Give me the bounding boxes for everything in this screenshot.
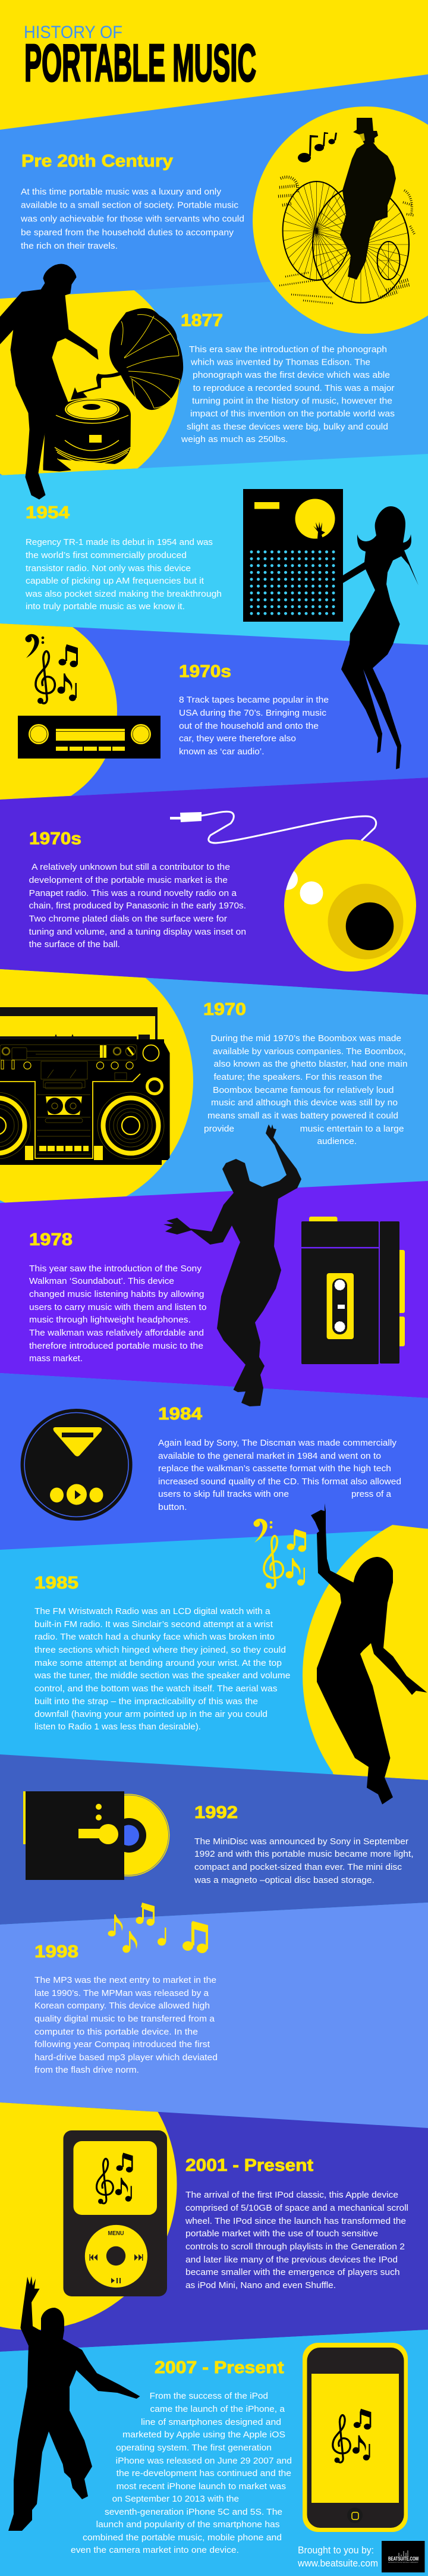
logo: beatsuite <box>382 2541 424 2572</box>
text block: pre 20th century: was only achievable for those with servants who could <box>20 214 244 224</box>
text block: 1954 <box>25 538 222 612</box>
heading: 1998: 1998 <box>34 1942 78 1961</box>
text block: 1998: from the flash drive norm. <box>34 2066 139 2075</box>
icon: music notes <box>333 2409 371 2463</box>
small speaker ring <box>147 1079 162 1093</box>
text block: 2001: as iPod Mini, Nano and even Shuffle. <box>185 2281 336 2290</box>
horn ribs <box>121 315 180 408</box>
panel: 1978 walkman <box>0 1181 428 1398</box>
text block: pre 20th century: be spared from the household duties to accompany <box>21 228 234 238</box>
text block: 1985: three sections which hinged where they joined, so they could <box>34 1646 286 1655</box>
text block: 1984: available to the general market in 1984 and went on to <box>158 1452 381 1461</box>
text block: 1984: users to skip full tracks with one <box>158 1490 289 1499</box>
panel: 1998 mp3 <box>0 1903 428 2128</box>
panel: 1970s 8 track <box>0 623 428 800</box>
text block: 1970 boombox: provide <box>204 1124 234 1134</box>
bushes and ground speckle <box>278 177 415 303</box>
panel: 2001 ipod <box>0 2102 428 2352</box>
heading: 1984: 1984 <box>158 1405 202 1424</box>
text block: 1970s panapet: Panapet radio. This was a round novelty radio on a <box>29 889 237 898</box>
text block: 1992: The MiniDisc was announced by Sony in September <box>194 1837 408 1847</box>
text block: 2007: operating system. The first generation <box>116 2443 272 2453</box>
panel: 1992 minidisc <box>0 1754 428 1925</box>
credit text: Brought to you by: <box>298 2544 374 2556</box>
text block: 1877: slight as these devices were big, bulky and could <box>187 422 388 432</box>
text block: 1877: turning point in the history of music, however the <box>192 396 392 406</box>
silhouette: dancing woman <box>311 1503 427 1804</box>
text block: 1998: following year Compaq introduced the first <box>34 2040 210 2049</box>
icon: car radio <box>18 716 160 759</box>
yellow circle overlap: 1985 <box>333 1767 428 1780</box>
icon: ipod <box>63 2130 167 2296</box>
text block: 1978: changed music listening habits by allowing <box>29 1290 204 1299</box>
text block: 1970s panapet <box>29 863 246 949</box>
text block: 2007: launch and popularity of the smartphone has <box>96 2520 280 2530</box>
text block: 1978: This year saw the introduction of the Sony <box>29 1264 202 1274</box>
heading: 2007 - present: 2007 - Present <box>155 2358 284 2377</box>
text block: 1978: Walkman ‘Soundabout’. This device <box>29 1277 174 1286</box>
text block: 1978: therefore introduced portable music to the <box>29 1342 203 1351</box>
heading: 1978: 1978 <box>29 1230 73 1249</box>
text block: 1877: phonograph was the first device which was able <box>193 371 390 380</box>
text block: 2007: came the launch of the iPhone, a <box>150 2405 285 2414</box>
text block: 2001: wheel. The IPod since the launch has transformed the <box>185 2217 406 2226</box>
text block: 1970s 8 track: USA during the 70’s. Bringing music <box>179 709 326 718</box>
text block: 1978 <box>29 1264 207 1364</box>
text block: 1970 boombox: available by various companies. The Boombox, <box>213 1047 406 1057</box>
heading: 1954: 1954 <box>26 503 70 522</box>
text block: 1954: into truly portable music as we know it. <box>26 602 185 612</box>
text block: 1970s panapet: chain, first produced by Panasonic in the early 1970s. <box>29 901 246 911</box>
boombox buttons <box>25 1146 103 1160</box>
icon: music notes <box>108 1903 208 1953</box>
text block: 1954: was also pocket sized making the breakthrough <box>25 590 222 599</box>
text block: 1970s 8 track: car, they were therefore also <box>179 734 296 744</box>
text block: pre 20th century: available to a small section of society. Portable music <box>21 201 238 211</box>
text block: 2001: portable market with the use of touch sensitive <box>185 2229 378 2239</box>
heading: 1970s: 1970s <box>179 662 231 681</box>
icon: music notes <box>25 634 78 704</box>
text block: 1970s panapet: tuning and volume, and a tuning display was inset on <box>29 927 246 937</box>
text block: 1970s panapet: A relatively unknown but still a contributor to the <box>32 863 230 872</box>
yellow circle: bicycle <box>253 106 428 334</box>
icon: music notes <box>298 132 337 162</box>
text block: 1984: button. <box>158 1503 187 1512</box>
text block: 1970 boombox: music and although this device was still by no <box>211 1098 398 1108</box>
ipod click wheel: MENU <box>108 2230 124 2237</box>
text block: 2001: became smaller with the emergence of players such <box>185 2268 400 2277</box>
yellow circle: 1970s <box>0 623 117 800</box>
yellow circle: 1970 <box>0 969 193 1203</box>
text block: 2001: The arrival of the first IPod classic, this Apple device <box>185 2190 398 2200</box>
text block: 2001 <box>185 2190 408 2290</box>
walkman cassette <box>327 1273 354 1339</box>
text block: 1954: capable of picking up AM frequencies but it <box>26 576 204 586</box>
text block: 2007: the re-development has continued and the <box>117 2469 291 2478</box>
icon: phonograph <box>55 308 183 464</box>
yellow circle: 1877 <box>0 290 179 475</box>
silhouette: waving man <box>8 2276 140 2531</box>
rider face detail <box>357 133 365 143</box>
text block: 1970s 8 track: known as ‘car audio’. <box>179 747 264 757</box>
text block: 2007 <box>71 2392 292 2555</box>
text block: 1998: The MP3 was the next entry to market in the <box>34 1976 216 1985</box>
text block: 1970s panapet: development of the portable music market is the <box>29 876 228 885</box>
text block: 1970 boombox: means small as it was battery powered it could <box>207 1111 398 1121</box>
text block: 1970 boombox: music entertain to a large <box>300 1124 404 1134</box>
text block: 1970s 8 track: out of the household and onto the <box>179 722 319 731</box>
phonograph horn <box>109 308 183 410</box>
text block: 1985: control, and the bottom was the watch itself. The aerial was <box>34 1684 277 1694</box>
icon: transistor radio <box>243 489 343 622</box>
text block: 1954: transistor radio. Not only was this device <box>26 564 191 574</box>
text block: 1978: mass market. <box>29 1354 83 1364</box>
text block: 2007: line of smartphones designed and <box>141 2418 281 2427</box>
panel: 1984 discman <box>0 1373 428 1559</box>
text block: 1954: the world’s first commercially produced <box>26 551 187 560</box>
heading: 1985: 1985 <box>34 1574 78 1593</box>
text block: 1970s 8 track: 8 Track tapes became popular in the <box>179 695 329 705</box>
panel: 1970 boombox <box>0 969 428 1203</box>
text block: 1985: make some attempt at bending around your wrist. At the top <box>34 1659 282 1668</box>
text block: 1970 boombox: also known as the ghetto blaster, had one main <box>214 1060 408 1069</box>
text block: 1877: weigh as much as 250lbs. <box>181 435 288 444</box>
icon: boombox <box>0 1007 170 1165</box>
text block: 1998: quality digital music to be transferred from a <box>34 2014 215 2024</box>
boombox cassette deck <box>37 1080 90 1154</box>
silhouette: man at phonograph <box>0 264 98 499</box>
text block: 1970s 8 track <box>179 695 329 757</box>
text block: 1998: hard-drive based mp3 player which deviated <box>34 2053 218 2063</box>
text block: 2001: and later like many of the previous devices the IPod <box>185 2255 398 2265</box>
text block: 2007: even the camera market into one device. <box>71 2546 239 2555</box>
text block: 1970s panapet: Two chrome plated dials on the surface were for <box>29 914 227 924</box>
text block: 1998 <box>34 1976 218 2075</box>
heading: 1877: 1877 <box>181 311 223 330</box>
left speaker <box>0 1092 30 1159</box>
icon: discman <box>21 1409 133 1521</box>
radio speaker dots <box>251 552 333 613</box>
icon: panapet ball radio <box>170 811 416 972</box>
text block: 1984: increased sound quality of the CD. This format also allowed <box>158 1477 401 1487</box>
panel: 1954 <box>0 454 428 648</box>
text block: 1985: built into the strap – the impracticability of this was the <box>34 1697 258 1706</box>
text block: pre 20th century: the rich on their travels. <box>21 242 118 251</box>
text block: 2001: comprised of 5/10GB of space and a mechanical scroll <box>185 2204 408 2213</box>
text block: 1992: 1992 and with this portable music became more light, <box>194 1850 414 1859</box>
heading: 1970: 1970 <box>203 1000 246 1019</box>
text block: 1992: was a magneto –optical disc based storage. <box>194 1876 374 1885</box>
text block: 2007: From the success of the iPod <box>150 2392 268 2401</box>
text block: 1985: radio. The watch had a chunky face which was broken into <box>34 1632 275 1642</box>
text block: 1992 <box>194 1837 414 1885</box>
tone arm <box>71 370 125 400</box>
panel: 1985 wristwatch radio <box>0 1518 428 1780</box>
yellow circle: 2001 <box>0 2102 177 2330</box>
text block: 2007: most recent iPhone launch to market was <box>117 2482 286 2492</box>
text block: 2007: iPhone was released on June 29 2007 and <box>116 2456 292 2466</box>
text block: 1978: The walkman was relatively affordable and <box>29 1328 204 1338</box>
text block: 2007: seventh-generation iPhone 5C and 5S. The <box>105 2508 282 2517</box>
text block: 1992: compact and pocket-sized than ever. The mini disc <box>194 1863 402 1872</box>
text block: 1970 boombox: During the mid 1970’s the Boombox was made <box>210 1034 401 1043</box>
yellow circle: 1985 <box>303 1525 428 1780</box>
credit text <box>297 2544 378 2569</box>
panel: title banner <box>0 0 428 143</box>
panel: 1877 <box>0 282 428 475</box>
text block: 1970 boombox <box>204 1034 408 1146</box>
text block: 1998: computer to this portable device. In the <box>34 2027 198 2037</box>
text block: 1877: impact of this invention on the portable world was <box>190 409 395 419</box>
text block: 1877: This era saw the introduction of the phonograph <box>189 345 387 355</box>
right speaker <box>97 1092 164 1159</box>
text block: 1998: late 1990’s. The MPMan was released by a <box>34 1989 209 1998</box>
bicycle wheels <box>283 181 409 303</box>
turntable base <box>55 399 131 464</box>
boombox casing outline <box>0 1074 140 1158</box>
text block: 1877: which was invented by Thomas Edison. The <box>190 358 370 368</box>
panel: 1970s panapet <box>0 778 428 995</box>
text block: 1978: users to carry music with them and listen to <box>29 1303 207 1312</box>
text block: 2007: marketed by Apple using the Apple iOS <box>122 2430 285 2440</box>
text block: pre 20th century: At this time portable music was a luxury and only <box>21 187 222 197</box>
illustration: man on penny-farthing bicycle <box>253 106 428 334</box>
panel: 2007 iphone <box>0 2330 428 2576</box>
text block: 1970 boombox: feature; the speakers. For this reason the <box>214 1073 382 1082</box>
text block: 1954: Regency TR-1 made its debut in 1954 and was <box>26 538 213 547</box>
heading: 1970s: 1970s <box>29 829 81 848</box>
icon: music notes <box>253 1519 306 1588</box>
boombox control panel <box>0 1045 159 1080</box>
text block: 1877 <box>181 345 395 444</box>
text block: 1985: downfall (having your arm pointed up in the air you could <box>34 1710 268 1719</box>
heading: 2001 - present: 2001 - Present <box>185 2156 313 2175</box>
logo: beatsuite: PRODUCTION MUSIC LIBRARY <box>388 2561 418 2564</box>
text block: 1984 <box>158 1439 401 1512</box>
text block: 1984: replace the walkman’s cassette format with the high tech <box>158 1464 391 1474</box>
text block: 1970 boombox: audience. <box>317 1137 357 1146</box>
heading: 1992: 1992 <box>194 1803 238 1822</box>
icon: minidisc <box>23 1791 169 1880</box>
text block: pre 20th century <box>20 187 244 251</box>
text block: 1998: Korean company. This device allowed high <box>34 2001 210 2011</box>
icon: walkman <box>301 1217 405 1364</box>
text block: 1984: Again lead by Sony, The Discman was made commercially <box>158 1439 397 1448</box>
icon: iphone <box>303 2343 408 2532</box>
title: history of: HISTORY OF <box>24 23 122 42</box>
text block: 2001: controls to scroll through playlists in the Generation 2 <box>185 2242 405 2252</box>
silhouette: dancing man <box>163 1124 301 1406</box>
text block: 1984: press of a <box>351 1490 392 1499</box>
panel: pre 20th century <box>0 74 428 306</box>
text block: 1970 boombox: Boombox became famous for relatively loud <box>213 1086 394 1095</box>
text block: 1985: The FM Wristwatch Radio was an LCD digital watch with a <box>34 1607 270 1616</box>
heading: pre 20th century: Pre 20th Century <box>21 152 173 171</box>
text block: 1970s panapet: the surface of the ball. <box>29 940 120 949</box>
text block: 2007: combined the portable music, mobile phone and <box>83 2533 282 2543</box>
text block: 2007: on September 10 2013 with the <box>112 2494 239 2504</box>
silhouette: woman with radio <box>341 506 418 769</box>
text block: 1978: music through lightweight headphones. <box>29 1315 191 1325</box>
text block: 1985: was the tuner, the middle section was the speaker and volume <box>34 1671 290 1681</box>
rider silhouette <box>340 118 396 280</box>
ipod click wheel <box>85 2225 147 2287</box>
text block: 1985: built-in FM radio. It was Sinclair’s second attempt at a wrist <box>34 1620 273 1629</box>
icon: music notes <box>96 2152 133 2204</box>
hand on radio dial <box>313 522 325 538</box>
text block: 1985: listen to Radio 1 was less than desirable). <box>34 1722 201 1732</box>
credit text: www.beatsuite.com <box>297 2558 378 2569</box>
text block: 1985 <box>34 1607 290 1732</box>
text block: 1877: to reproduce a recorded sound. This was a major <box>193 384 395 393</box>
